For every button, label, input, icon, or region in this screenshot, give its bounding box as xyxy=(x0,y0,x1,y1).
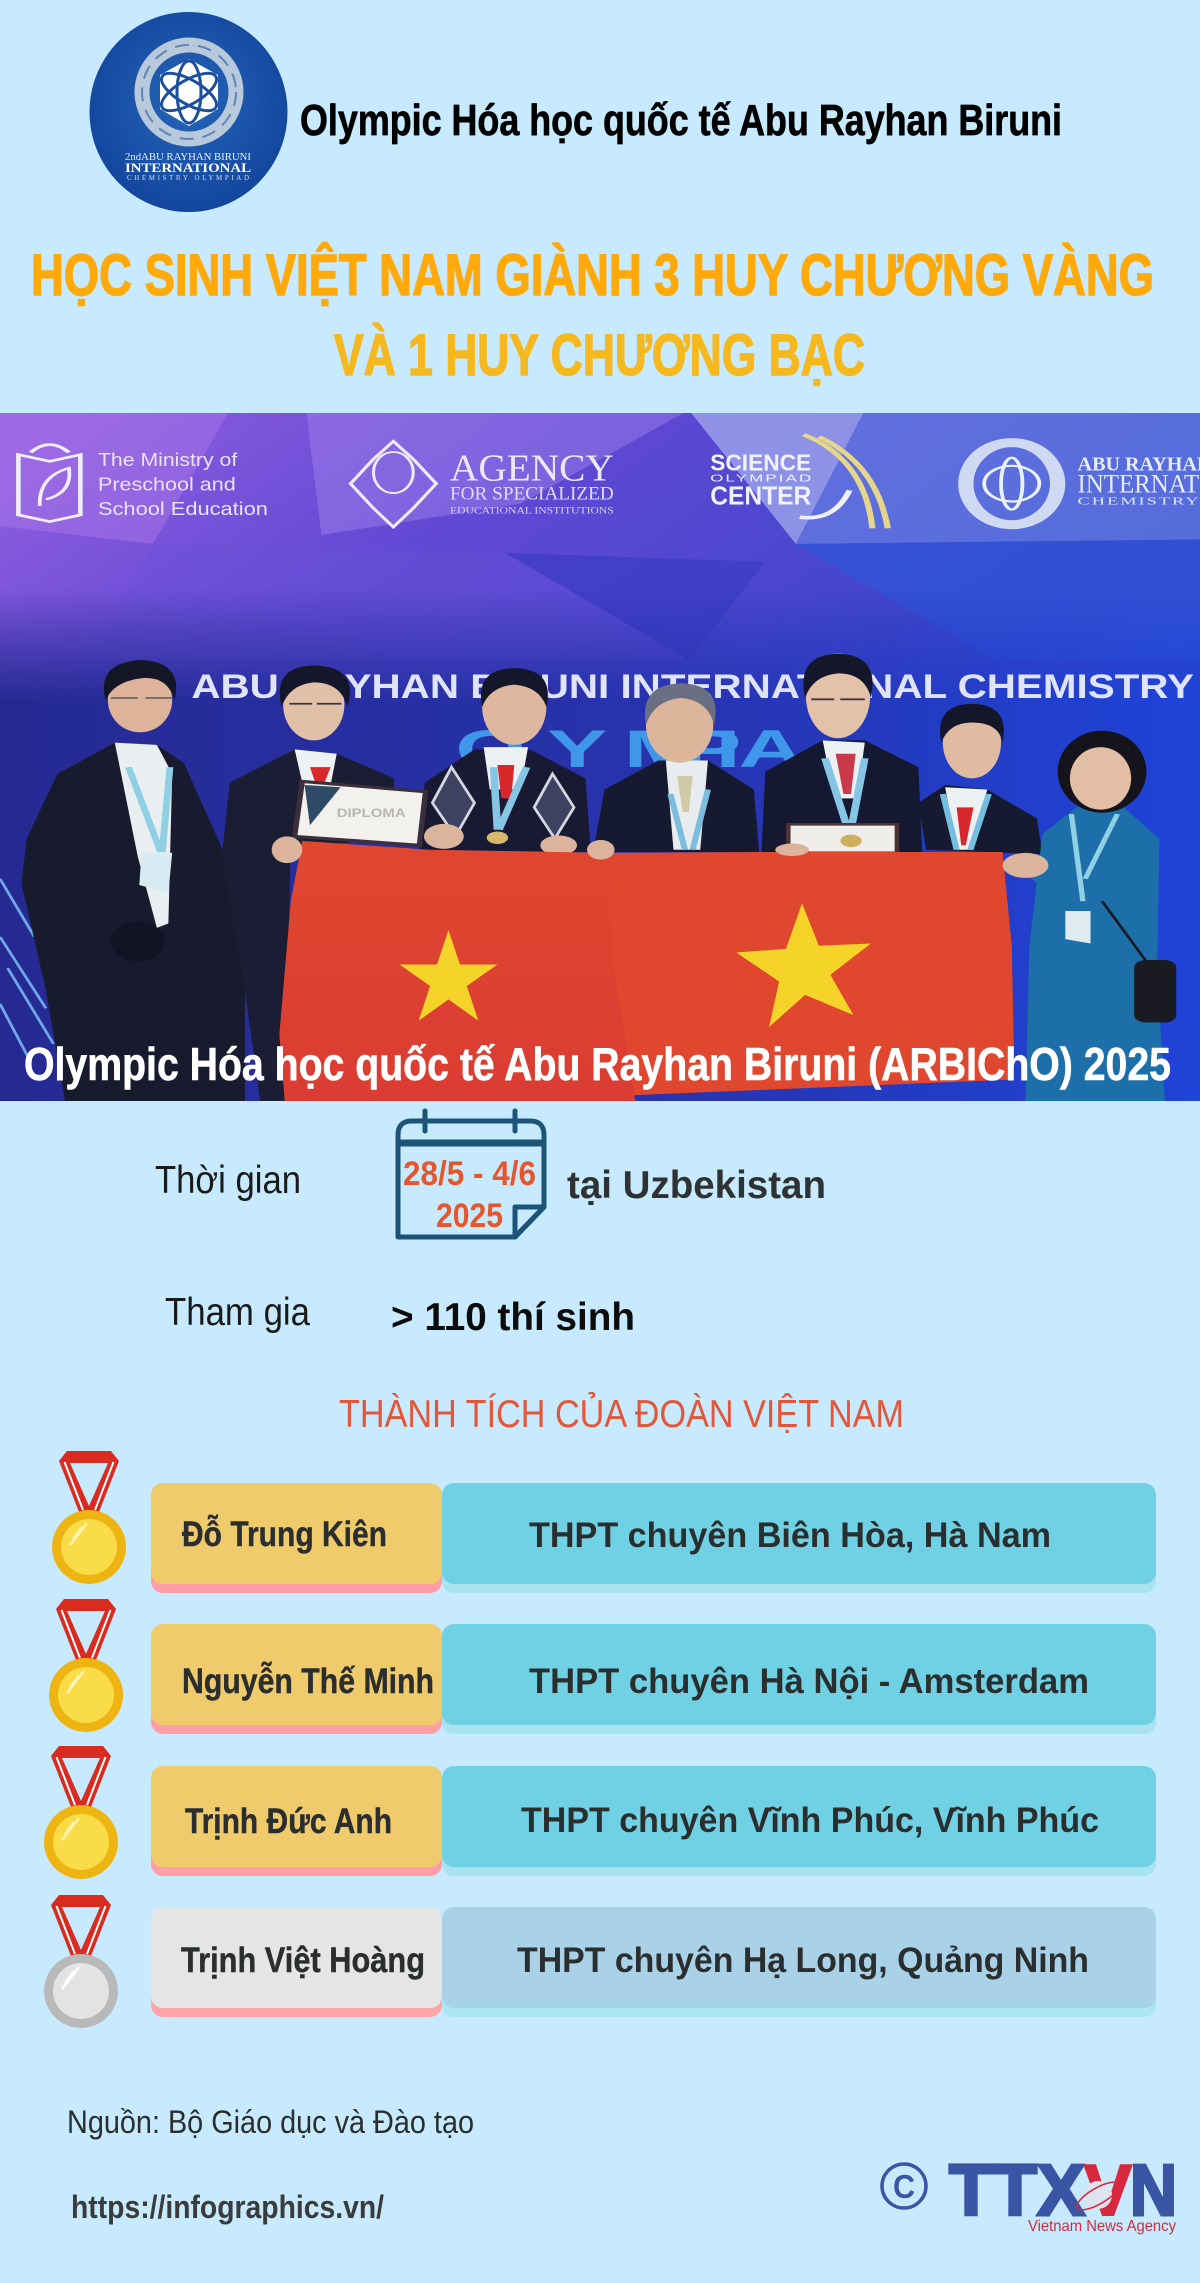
certificate right xyxy=(788,824,897,853)
icon: gold medal 1 xyxy=(52,1451,126,1584)
icon: calendar with dates: 2025 xyxy=(436,1197,503,1235)
logo: TTXVN: N xyxy=(1130,2151,1177,2231)
heading: achievements: THÀNH TÍCH CỦA ĐOÀN VIỆT NAM xyxy=(339,1392,904,1436)
trophies xyxy=(424,767,577,855)
person 5 xyxy=(761,653,922,852)
logo: TTXVN: Vietnam News Agency xyxy=(1028,2218,1176,2235)
logo: Abu Rayhan Biruni olympiad emblem: CHEMISTRY OLYMPIAD xyxy=(127,174,249,182)
location: tại Uzbekistan xyxy=(567,1164,826,1207)
logo: Abu Rayhan Biruni olympiad emblem: INTERNATIONAL xyxy=(125,160,251,175)
person 6 xyxy=(918,704,1042,854)
row 3: THPT chuyên Vĩnh Phúc, Vĩnh Phúc xyxy=(521,1801,1099,1840)
backdrop logo: ministry: Preschool and xyxy=(98,473,236,495)
row 3: Trịnh Đức Anh xyxy=(185,1802,392,1841)
certificate left: DIPLOMA xyxy=(337,807,406,820)
website: https://infographics.vn/ xyxy=(71,2189,384,2225)
title: VÀ 1 HUY CHƯƠNG BẠC xyxy=(334,323,865,388)
backdrop logo: olympiad emblem: CHEMISTRY xyxy=(1078,496,1199,508)
certificate left xyxy=(295,781,426,845)
row 4: THPT chuyên Hạ Long, Quảng Ninh xyxy=(517,1941,1089,1980)
backdrop logo: agency: AGENCY xyxy=(450,447,614,489)
row 4: Trịnh Việt Hoàng xyxy=(181,1941,425,1980)
logo: Abu Rayhan Biruni olympiad emblem: 2ndABU RAYHAN BIRUNI xyxy=(125,151,251,163)
row 2: Nguyễn Thế Minh xyxy=(182,1661,434,1701)
logo: TTXVN xyxy=(882,2151,1177,2235)
icon: calendar with dates: 28/5 - 4/6 xyxy=(403,1155,536,1193)
person 3 xyxy=(419,668,591,852)
backdrop logo: agency: FOR SPECIALIZED xyxy=(450,483,614,504)
icon: calendar with dates xyxy=(398,1111,544,1237)
flag right xyxy=(608,844,1048,1095)
person 7 xyxy=(1018,731,1176,1101)
icon: gold medal 3 xyxy=(44,1746,118,1879)
row 1: THPT chuyên Biên Hòa, Hà Nam xyxy=(529,1516,1051,1555)
backdrop banner text: OYMPIA xyxy=(455,719,804,779)
logo: TTXVN: V xyxy=(1084,2151,1132,2231)
person 2 xyxy=(222,665,394,1101)
backdrop logo: science olympiad center xyxy=(710,435,888,528)
backdrop logo: ministry: School Education xyxy=(98,498,268,519)
row 1: Đỗ Trung Kiên xyxy=(182,1514,387,1554)
row 3 xyxy=(151,1766,1156,1876)
icon: silver medal xyxy=(44,1895,118,2028)
backdrop logo: ministry: The Ministry of xyxy=(98,449,238,470)
flag left xyxy=(272,836,635,1101)
backdrop logo: agency xyxy=(351,441,614,527)
backdrop logo: science olympiad center: OLYMPIAD xyxy=(710,473,811,484)
row 1 xyxy=(151,1483,1156,1593)
row 4 xyxy=(151,1907,1156,2017)
label: time: Thời gian xyxy=(155,1159,301,1202)
backdrop logo: agency: EDUCATIONAL INSTITUTIONS xyxy=(450,505,614,516)
photo backdrop xyxy=(0,410,1200,1106)
participants value: > 110 thí sinh xyxy=(391,1296,635,1339)
backdrop banner text xyxy=(191,668,1194,779)
logo: TTXVN: C xyxy=(893,2168,915,2205)
panel: team photo xyxy=(0,410,1200,1106)
person 4 xyxy=(593,683,759,852)
row 2: THPT chuyên Hà Nội - Amsterdam xyxy=(529,1662,1089,1701)
icon: gold medal 2 xyxy=(49,1599,123,1732)
person 1 xyxy=(21,660,245,1101)
logo: TTXVN: TTX xyxy=(949,2151,1085,2231)
logo: Abu Rayhan Biruni olympiad emblem xyxy=(90,12,288,212)
backdrop logo: science olympiad center: CENTER xyxy=(710,481,811,510)
source: Nguồn: Bộ Giáo dục và Đào tạo xyxy=(67,2104,474,2140)
backdrop logo: science olympiad center: SCIENCE xyxy=(710,450,811,475)
backdrop logo: ministry xyxy=(18,445,268,522)
backdrop logo: olympiad emblem xyxy=(966,443,1200,525)
title xyxy=(31,243,1154,388)
row 2 xyxy=(151,1624,1156,1734)
label: participants: Tham gia xyxy=(165,1291,310,1334)
